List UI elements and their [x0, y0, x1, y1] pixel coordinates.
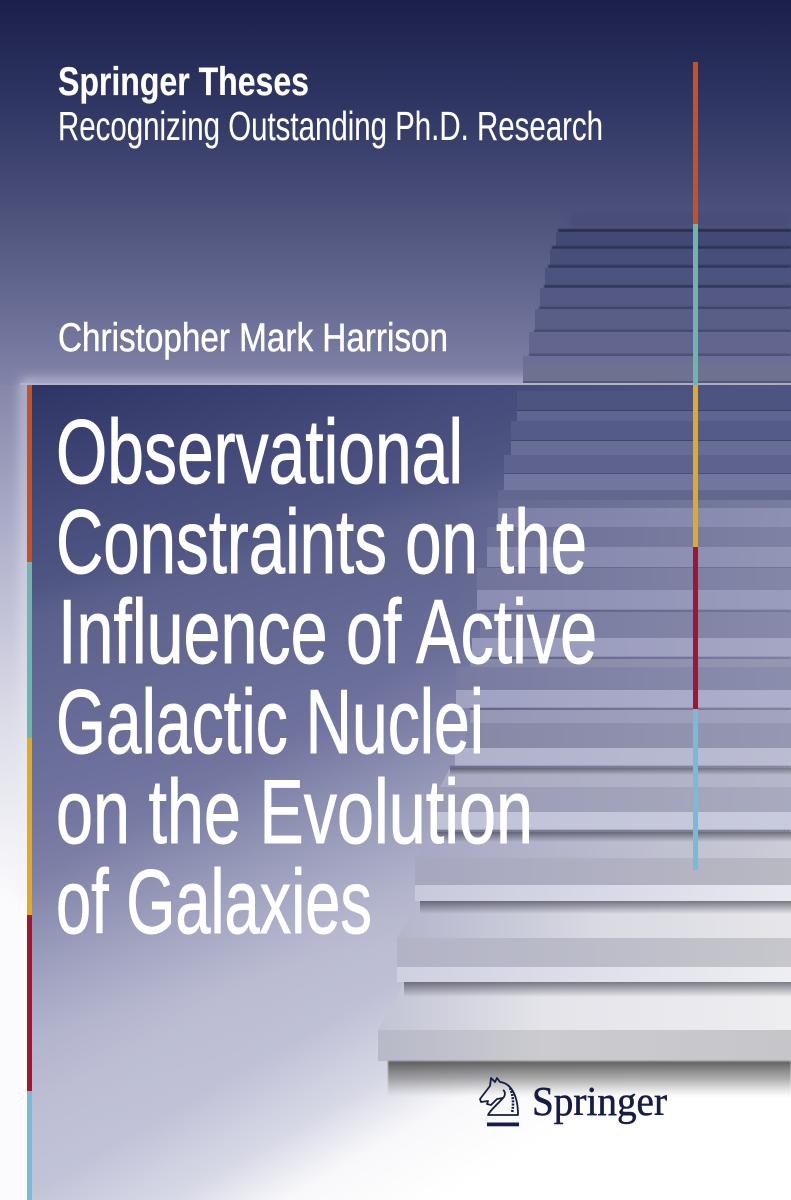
book title: of Galaxies: [56, 852, 372, 953]
series name: Springer Theses: [58, 60, 309, 104]
book title: Observational: [56, 402, 463, 503]
author: Christopher Mark Harrison: [58, 316, 448, 360]
upper steps: [20, 214, 791, 385]
title panel background: [27, 385, 791, 1200]
right vertical colour bar: [693, 62, 698, 870]
wordmark: Springer: [532, 1078, 667, 1124]
panel lower-right white fade: [27, 385, 791, 1200]
glow around title panel: [25, 383, 640, 900]
book title: Galactic Nuclei: [56, 672, 484, 773]
right-side highlight on steps: [450, 500, 791, 830]
publisher logo: [480, 1078, 667, 1126]
lower steps: [378, 832, 791, 1061]
book title: Influence of Active: [58, 582, 597, 683]
shadow under bottom step: [388, 1061, 791, 1097]
left vertical colour bar: [27, 385, 32, 1200]
book title: on the Evolution: [56, 762, 533, 863]
icon: chess knight: [480, 1078, 519, 1126]
background: left margin strip: [0, 385, 27, 1200]
book title: [56, 402, 597, 953]
staircase: [20, 214, 791, 1061]
background: upper gradient: [0, 0, 791, 385]
middle steps: [433, 391, 791, 832]
book title: Constraints on the: [56, 492, 587, 593]
